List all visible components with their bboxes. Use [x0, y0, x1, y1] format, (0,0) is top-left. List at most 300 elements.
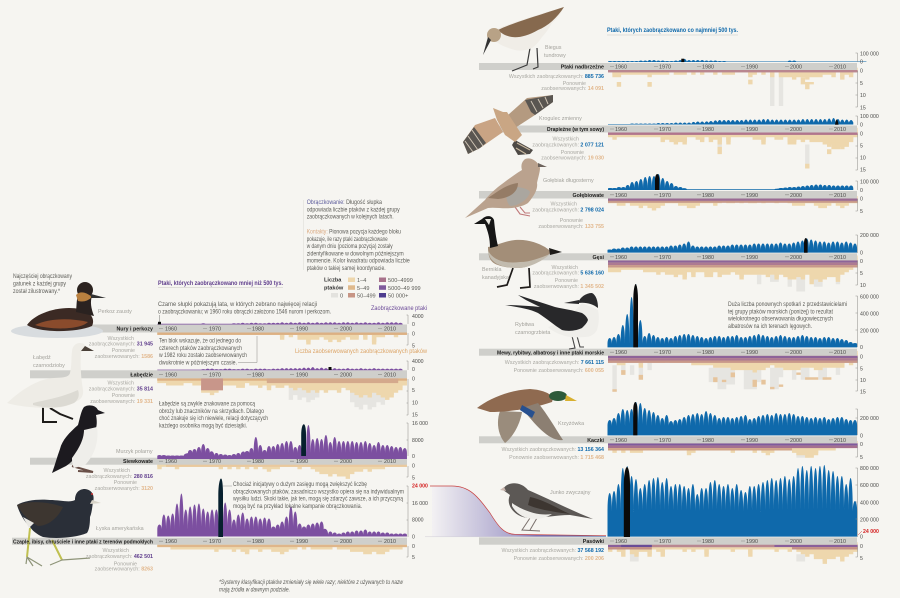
group label — [583, 539, 846, 545]
species name: Rybitwa — [515, 322, 534, 328]
species name: tundrowy — [544, 53, 566, 59]
group label — [547, 127, 846, 133]
species name: Krzyżówka — [558, 421, 584, 427]
group label: 1980 — [702, 193, 714, 199]
axis labels: 0 — [412, 454, 415, 460]
stats: Ponownie — [563, 81, 586, 87]
group label: 1960 — [165, 459, 177, 465]
stats — [509, 74, 604, 92]
axis labels: 10 — [860, 156, 866, 162]
group label: 2000 — [340, 539, 352, 545]
icon: sandpiper — [483, 7, 564, 71]
group label: 1980 — [702, 539, 714, 545]
callout: example block — [158, 336, 257, 366]
group label: Nury i perkozy — [116, 326, 153, 332]
species name: Perkoz zausty — [98, 309, 132, 315]
axis labels: 600 000 — [860, 483, 879, 489]
ringing area chart — [608, 174, 853, 190]
stats: zaobrączkowanych: 35 814 — [89, 386, 153, 392]
callout: albatross recoveries: tej grupy ptaków morskich (poniżej) to rezultat — [728, 309, 833, 315]
group label: Gęsi — [593, 255, 605, 261]
heading: under 500 thousand: Ptaki, których zaobrączkowano mniej niż 500 tys. — [158, 280, 283, 287]
axis labels: 400 000 — [860, 312, 879, 318]
axis labels — [860, 294, 879, 396]
recovery heatmap — [157, 462, 407, 479]
group label — [123, 459, 396, 465]
recovery heatmap — [157, 376, 407, 410]
group label: Drapieżne (w tym sowy) — [547, 127, 604, 133]
axis labels: 0 — [860, 60, 863, 66]
axis — [406, 486, 408, 557]
colour key: number of birds: 0 — [340, 294, 343, 300]
axis labels: 16 000 — [412, 421, 428, 427]
stats: zaobserwowanych: 1586 — [95, 354, 153, 360]
panel: Ptaki nadbrzeżne — [479, 7, 879, 112]
stats: zaobserwowanych: 14 091 — [541, 86, 604, 92]
callout: albatross recoveries: albatrosów na ich terenach lęgowych. — [728, 324, 812, 330]
axis labels: 0 — [412, 544, 415, 550]
species name: Biegus — [545, 45, 562, 51]
group label: 1960 — [615, 438, 627, 444]
axis labels: 0 — [860, 196, 863, 202]
ringing area chart — [608, 465, 857, 537]
legend explanation: Obrączkowanie: Długość słupka — [307, 200, 383, 206]
colour key: number of birds: 500–4999 — [388, 278, 413, 284]
annotation: spikes: Chociaż inicjatywy o dużym zasięgu mogą zwiększyć liczbę — [233, 482, 368, 488]
axis labels: 5 — [860, 144, 863, 150]
legend explanation: pokazuje, ile razy ptaki zaobrączkowane — [307, 237, 388, 243]
axis labels: 600 000 — [860, 294, 879, 300]
icon: Canada goose — [474, 216, 562, 288]
icon: grebe — [11, 282, 106, 338]
panel: Gołębiowate — [465, 158, 879, 230]
recovery heatmap — [608, 351, 858, 392]
group label — [130, 372, 396, 378]
axis — [856, 409, 858, 457]
group label: 2000 — [790, 255, 802, 261]
annotation: swans: choć znakuje się ich niewiele, relacji dotyczących — [159, 416, 268, 422]
axis — [856, 116, 858, 170]
group label: 1970 — [659, 350, 671, 356]
stats: Wszystkich zaobrączkowanych: 7 661 115 — [505, 360, 604, 366]
axis labels: 4000 — [412, 359, 424, 365]
stats: Wszystkich zaobrączkowanych: 885 736 — [509, 74, 604, 80]
stats — [532, 265, 604, 290]
group label: Siewkowate — [123, 459, 153, 465]
group label: 1980 — [702, 65, 714, 71]
axis labels: 16 000 — [412, 501, 428, 507]
axis labels: 0 — [412, 322, 415, 328]
axis labels — [412, 421, 428, 482]
group label: 1960 — [165, 326, 177, 332]
axis labels: 5 — [860, 209, 863, 215]
stats — [89, 380, 153, 405]
group label: 1970 — [659, 539, 671, 545]
group label — [116, 326, 396, 332]
axis labels: 5 — [860, 81, 863, 87]
stats — [532, 136, 604, 162]
group label: 1970 — [659, 65, 671, 71]
axis labels: 0 — [860, 250, 863, 256]
black peak bar — [804, 238, 808, 253]
stats: Ponownie zaobserwowanych: 1 715 468 — [509, 455, 604, 461]
group label: 2010 — [834, 127, 846, 133]
group label: 1990 — [746, 65, 758, 71]
axis labels: 0 — [860, 442, 863, 448]
colour key: number of birds: 50–499 — [357, 294, 376, 300]
axis labels: 0 — [412, 534, 415, 540]
group label: 2010 — [384, 326, 396, 332]
axis labels: 0 — [860, 345, 863, 351]
annotation: swans — [159, 402, 268, 429]
axis labels: 24 000 — [412, 484, 428, 490]
stats — [505, 360, 604, 374]
axis labels: 8000 — [412, 518, 424, 524]
stats — [502, 447, 604, 461]
axis — [856, 53, 858, 107]
annotation: spikes: obrączkowanych ptaków, zasadniczo wszystko opiera się na indywidualnym — [233, 489, 404, 495]
legend explanation — [304, 200, 410, 272]
group label: 1980 — [702, 350, 714, 356]
legend explanation: zaobrączkowanych w kolejnych latach. — [307, 215, 394, 221]
group label: Ptaki nadbrzeżne — [561, 65, 604, 71]
panel: Nury i perkozy — [11, 282, 424, 360]
stats — [89, 336, 153, 360]
axis — [856, 181, 858, 211]
ringing area chart — [608, 284, 857, 347]
black peak bar — [633, 284, 638, 347]
group label: 1960 — [615, 350, 627, 356]
group label: 2010 — [384, 539, 396, 545]
group label — [13, 539, 396, 545]
icon: hawk — [463, 95, 553, 155]
axis labels — [860, 180, 879, 215]
axis labels: 5 — [860, 366, 863, 372]
legend explanation: Kontakty: Pionowa pozycja każdego bloku — [307, 230, 401, 236]
group label: 1960 — [615, 65, 627, 71]
axis labels: 15 — [412, 412, 418, 418]
callout: example block: dwukrotnie w późniejszym czasie. — [159, 360, 237, 366]
group label: 2000 — [790, 65, 802, 71]
axis labels — [860, 52, 879, 112]
grey band — [479, 191, 857, 198]
group label: 1990 — [296, 459, 308, 465]
axis labels: 4000 — [412, 314, 424, 320]
stats: Ponownie zaobserwowanych: 200 206 — [514, 556, 604, 562]
group label: 2010 — [834, 438, 846, 444]
species name: kanadyjska — [482, 275, 509, 281]
grey band — [30, 370, 407, 378]
callout: example block: Ten blok wskazuje, że od jednego do — [159, 338, 242, 344]
axis labels: 0 — [412, 376, 415, 382]
axis title: recovered birds: Liczba zaobserwowanych zaobrączkowanych ptaków — [295, 349, 428, 355]
group label: 1970 — [659, 127, 671, 133]
axis — [856, 468, 858, 557]
group label: 2010 — [834, 193, 846, 199]
grey band — [30, 458, 407, 465]
stats: zaobrączkowanych: 280 816 — [86, 474, 153, 480]
axis labels: 15 — [860, 168, 866, 174]
stats: Wszystkich — [104, 468, 130, 474]
axis — [406, 315, 408, 345]
axis labels — [412, 314, 424, 350]
species name: Łabędź — [33, 355, 51, 361]
group label: 1970 — [659, 438, 671, 444]
axis labels: 800 000 — [860, 466, 879, 472]
stats: Ponownie zaobserwowanych: 600 055 — [514, 368, 604, 374]
group label: 1980 — [252, 326, 264, 332]
stats: Wszystkich — [550, 202, 577, 208]
black peak bar — [681, 59, 684, 62]
stats: zaobrączkowanych: 5 636 160 — [532, 270, 604, 276]
legend explanation: ptaków o takiej samej koordynacie. — [307, 266, 386, 272]
recovery heatmap — [608, 128, 858, 168]
recovery heatmap — [157, 542, 407, 554]
callout: albatross recoveries: Duża liczba ponownych spotkań z przedstawicielami — [728, 302, 847, 308]
legend explanation: momencie. Kolor kwadratu odpowiada liczbie — [307, 259, 410, 265]
group label: 1970 — [209, 459, 221, 465]
colour key: number of birds: Liczba — [324, 278, 342, 284]
axis labels: 10 — [860, 283, 866, 289]
panel: Gęsi — [474, 216, 879, 292]
group label: Czaple, ibisy, chruściele i inne ptaki z terenów podmokłych — [13, 539, 153, 545]
group label: 1960 — [615, 255, 627, 261]
group label: 1990 — [296, 372, 308, 378]
group label: 2000 — [790, 350, 802, 356]
ringing area chart — [608, 59, 866, 62]
recovery heatmap — [157, 330, 407, 344]
stats: Wszystkich — [552, 265, 578, 271]
stats: zaobserwowanych: 3120 — [95, 486, 153, 492]
group label: 1980 — [702, 127, 714, 133]
axis labels: 0 — [860, 188, 863, 194]
axis labels: 24 000 — [863, 529, 879, 535]
group label: 1990 — [746, 350, 758, 356]
group label: 1960 — [165, 372, 177, 378]
species name: Łyska amerykańska — [96, 526, 144, 532]
axis labels: 5 — [860, 556, 863, 562]
grey band — [479, 349, 857, 356]
icon: coot — [17, 489, 101, 566]
red marker — [858, 531, 862, 535]
group label: 2010 — [834, 350, 846, 356]
species name: czarnogrzbieta — [515, 330, 550, 336]
axis labels: 5 — [412, 344, 415, 350]
axis labels: 15 — [860, 106, 866, 112]
axis labels — [412, 484, 428, 561]
stats: zaobserwowanych: 19 030 — [541, 156, 604, 162]
colour key: number of birds: 50 000+ — [388, 294, 408, 300]
grey band — [12, 538, 407, 545]
stats: Ponownie — [114, 562, 137, 568]
icon: junco — [500, 483, 593, 531]
axis labels: 200 000 — [860, 416, 879, 422]
callout: albatross recoveries: wielokrotnego obserwowania długowiecznych — [727, 317, 833, 323]
axis labels: 200 000 — [860, 328, 879, 334]
group label: 1990 — [746, 193, 758, 199]
icon: mallard — [477, 389, 577, 443]
group label: 2000 — [340, 372, 352, 378]
group label: 2000 — [790, 193, 802, 199]
axis labels — [860, 114, 879, 174]
black peak bar — [158, 322, 161, 324]
ringing area chart — [157, 322, 403, 324]
axis labels: 400 000 — [860, 500, 879, 506]
panel: Pasówki — [479, 465, 879, 564]
axis labels: 0 — [412, 367, 415, 373]
stats: zaobserwowanych: 133 755 — [538, 224, 604, 230]
species name: Junko zwyczajny — [550, 490, 591, 496]
panel: Łabędzie — [7, 343, 424, 422]
axis labels — [860, 416, 879, 461]
axis labels: 0 — [860, 132, 863, 138]
group label: 1970 — [659, 193, 671, 199]
axis labels: 200 000 — [860, 233, 879, 239]
group label: 1960 — [615, 539, 627, 545]
axis labels: 0 — [860, 259, 863, 265]
black peak bar — [301, 424, 306, 456]
intro note: illustrated species: gatunek z każdej grupy — [13, 282, 66, 288]
colour key: number of birds: ptaków — [324, 286, 344, 292]
species name: Murzyk polarny — [116, 449, 153, 455]
ringing area chart — [608, 402, 857, 435]
stats: Ponownie — [561, 150, 584, 156]
grey band — [479, 63, 857, 70]
group label — [572, 193, 846, 199]
axis labels: 0 — [860, 354, 863, 360]
group label: Łabędzie — [130, 372, 153, 378]
grey band — [479, 436, 857, 443]
group label: 1990 — [746, 127, 758, 133]
species name: Krogulec zmienny — [539, 116, 582, 122]
axis — [856, 296, 858, 391]
axis labels — [412, 359, 424, 418]
colour key: number of birds: 5000–49 999 — [388, 286, 421, 292]
callout: example block: czterech ptaków zaobrączkowanych — [159, 346, 242, 352]
group label: 2010 — [384, 459, 396, 465]
intro note: illustrated species: Najczęściej obrączkowany — [13, 274, 72, 280]
group label: 1990 — [746, 255, 758, 261]
group label — [593, 255, 846, 261]
stats: zaobrączkowanych: 2 077 121 — [532, 142, 604, 148]
axis labels — [860, 466, 879, 562]
stats: Ponownie — [114, 480, 137, 486]
group label: 1980 — [702, 438, 714, 444]
legend explanation: w danym dniu (pozioma pozycja) zostały — [306, 244, 393, 250]
black peak bar — [328, 367, 332, 370]
group label: 1970 — [209, 539, 221, 545]
intro note: illustrated species: został zilustrowany.* — [13, 289, 61, 295]
axis labels: 10 — [412, 400, 418, 406]
axis title: ringed birds: Zaobrączkowane ptaki — [371, 306, 427, 312]
group label: 1990 — [296, 326, 308, 332]
group label: 1960 — [615, 127, 627, 133]
axis labels: 0 — [412, 332, 415, 338]
recovery heatmap — [608, 441, 858, 458]
group label: 1980 — [702, 255, 714, 261]
group label: Kaczki — [587, 438, 605, 444]
recovery heatmap — [608, 542, 858, 564]
group label: 2000 — [790, 438, 802, 444]
panel: Siewkowate — [30, 405, 428, 492]
stats — [86, 468, 153, 492]
stats: Wszystkich — [108, 380, 134, 386]
stats — [502, 548, 604, 562]
stats: zaobserwowanych: 19 331 — [90, 399, 153, 405]
stats: Ponownie — [560, 218, 583, 224]
group label: Gołębiowate — [572, 193, 604, 199]
axis labels: 5 — [860, 271, 863, 277]
annotation: spikes — [223, 482, 404, 510]
grey band — [30, 324, 407, 332]
species name: Gołębiak długosterny — [543, 178, 594, 184]
group label: 1980 — [252, 459, 264, 465]
annotation: swans: Łabędzie są zwykle znakowane za pomocą — [159, 402, 256, 408]
axis labels: 0 — [860, 534, 863, 540]
callout: albatross recoveries — [727, 302, 847, 330]
ringing area chart — [157, 425, 407, 459]
footnote: mają źródła w dawnym podziale. — [219, 588, 290, 594]
group label: 2010 — [384, 372, 396, 378]
legend explanation: zidentyfikowane w dowolnym późniejszym — [307, 251, 404, 257]
group label: 2010 — [834, 65, 846, 71]
recovery heatmap — [608, 255, 858, 292]
icon: sooty tern — [505, 293, 599, 349]
annotation: spikes: wysiłku ludzi. Skoki takie, jak ten, mogą się zdarzyć zawsze, a ich przyczyną — [232, 497, 404, 503]
recovery heatmap — [608, 68, 858, 106]
colour key: number of birds: 5–49 — [357, 286, 369, 292]
group label: Mewy, rybitwy, albatrosy i inne ptaki morskie — [497, 350, 604, 356]
axis labels: 8000 — [412, 438, 424, 444]
ringing area chart — [157, 493, 407, 537]
group label: Pasówki — [583, 539, 605, 545]
axis labels: 0 — [860, 122, 863, 128]
black peak bar — [655, 174, 659, 190]
annotation: spikes: mogą być na przykład lokalne kampanie obrączkowania. — [233, 504, 362, 510]
axis labels: 0 — [860, 544, 863, 550]
ringing area chart — [157, 367, 403, 370]
stats: Ponownie — [555, 278, 578, 284]
group label: 1970 — [659, 255, 671, 261]
stats: Ponownie — [112, 348, 135, 354]
footnote: *Systemy klasyfikacji ptaków zmieniały się wiele razy; niektóre z używanych tu nazw — [219, 580, 404, 586]
group label — [587, 438, 846, 444]
grey band — [479, 253, 857, 260]
ringing area chart — [608, 118, 853, 124]
axis labels: 10 — [860, 378, 866, 384]
group label: 1990 — [746, 438, 758, 444]
stats: Wszystkich zaobrączkowanych: 13 156 364 — [502, 447, 604, 453]
stats — [86, 548, 153, 572]
panel: Kaczki — [477, 389, 879, 461]
scale connector: 24 000 comparison — [425, 486, 606, 537]
group label: 2000 — [340, 326, 352, 332]
colour key: number of birds — [324, 278, 421, 300]
colour key: number of birds: 1–4 — [357, 278, 366, 284]
axis labels: 100 000 — [860, 52, 879, 58]
axis labels: 0 — [412, 464, 415, 470]
annotation: black bars: Czarne słupki pokazują lata, w których zebrano najwięcej relacji — [158, 302, 317, 308]
group label: 1990 — [296, 539, 308, 545]
axis labels: 200 000 — [860, 518, 879, 524]
annotation: swans: każdego osobnika mogą być dziesiątki. — [159, 423, 247, 429]
panel: Mewy, rybitwy, albatrosy — [479, 284, 879, 396]
icon: dove — [465, 158, 547, 218]
annotation: black bars: o zaobrączkowaniu; w 1960 roku obrączki założono 1546 nurom i perkozom. — [158, 310, 331, 316]
icon: razorbill — [52, 405, 105, 473]
group label: 1960 — [165, 539, 177, 545]
axis labels: 0 — [860, 434, 863, 440]
